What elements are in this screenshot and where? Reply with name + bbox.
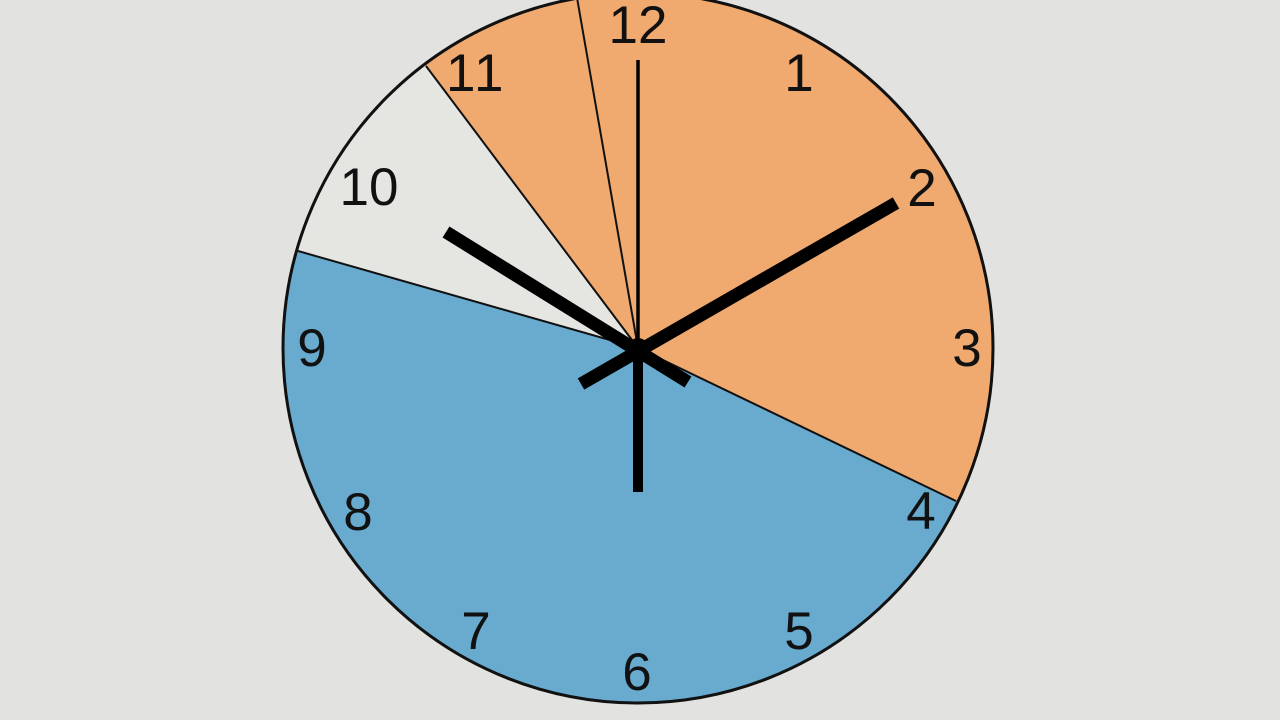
hour numbers: 6 bbox=[622, 643, 652, 702]
sector dividers bbox=[298, 0, 956, 501]
clock hands bbox=[446, 60, 896, 492]
hour numbers: 7 bbox=[461, 602, 491, 661]
clock rim bbox=[283, 0, 993, 703]
hour numbers: 11 bbox=[446, 44, 506, 103]
hour numbers bbox=[297, 0, 982, 702]
hour numbers: 4 bbox=[906, 482, 936, 541]
hour numbers: 9 bbox=[297, 319, 327, 378]
hand: ten o'clock hand bbox=[446, 232, 688, 382]
hour numbers: 2 bbox=[907, 159, 937, 218]
clock face bbox=[283, 0, 993, 703]
center hub bbox=[628, 338, 648, 358]
hour numbers: 3 bbox=[952, 319, 982, 378]
hand: thin twelve o'clock hand bbox=[636, 60, 640, 348]
hour numbers: 5 bbox=[784, 602, 814, 661]
hand: six o'clock hand bbox=[633, 348, 643, 492]
hour numbers: 10 bbox=[340, 158, 398, 217]
hand: two o'clock hand bbox=[581, 203, 896, 384]
hour numbers: 1 bbox=[784, 44, 814, 103]
sector: blue bbox=[283, 251, 958, 703]
sector: orange bbox=[425, 0, 993, 502]
hour numbers: 8 bbox=[343, 483, 373, 542]
